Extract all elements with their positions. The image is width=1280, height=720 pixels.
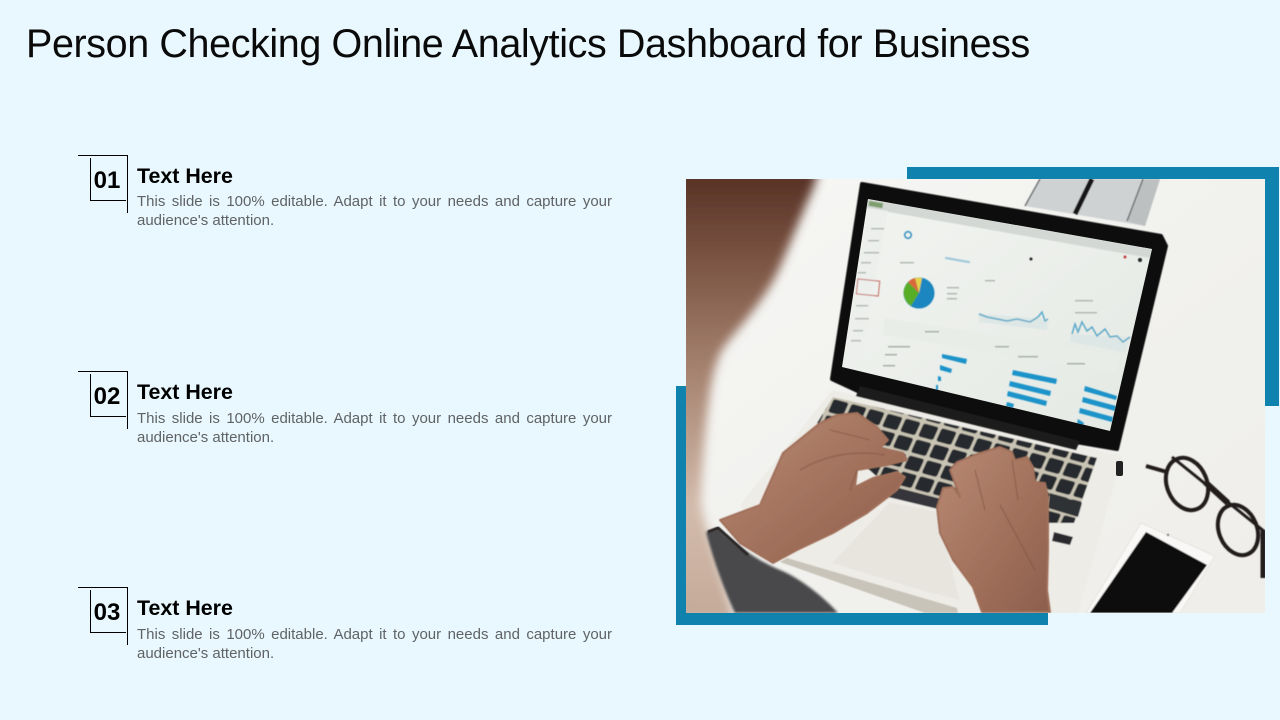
list item 02 — [78, 371, 612, 446]
glasses — [1146, 451, 1265, 578]
heading 03: Text Here — [137, 596, 233, 620]
head and shoulder — [676, 170, 818, 620]
wristband — [708, 528, 748, 555]
laptop hinge — [856, 386, 1080, 450]
number badge 01: 01 — [94, 167, 120, 194]
frame: top right bar — [907, 167, 1279, 406]
description 01: This slide is 100% editable. Adapt it to your needs and capture your audience's attention. — [137, 193, 612, 229]
line charts — [979, 312, 1130, 352]
heading 02: Text Here — [137, 380, 233, 404]
number badge 03: 03 — [94, 599, 120, 626]
number badge 02: 02 — [94, 383, 120, 410]
photo with frame: person using laptop — [676, 167, 1279, 625]
frame: bottom left bar — [676, 386, 1048, 625]
list item 01 — [78, 155, 612, 229]
pie chart — [904, 278, 934, 308]
pen — [1116, 461, 1123, 476]
list item 03 — [78, 587, 612, 662]
window slats — [1025, 179, 1160, 226]
description 02: This slide is 100% editable. Adapt it to your needs and capture your audience's attention. — [137, 410, 612, 446]
bar charts — [936, 354, 1117, 426]
description 03: This slide is 100% editable. Adapt it to your needs and capture your audience's attention. — [137, 626, 612, 662]
hands — [720, 413, 1050, 612]
laptop lid — [832, 184, 1166, 449]
heading 01: Text Here — [137, 164, 233, 188]
laptop base — [740, 390, 1122, 613]
laptop screen with dashboard — [842, 199, 1152, 431]
shirt shoulder — [706, 528, 838, 613]
title: Person Checking Online Analytics Dashboard for Business — [26, 22, 1030, 66]
phone — [1086, 523, 1215, 613]
photo — [676, 170, 1265, 620]
